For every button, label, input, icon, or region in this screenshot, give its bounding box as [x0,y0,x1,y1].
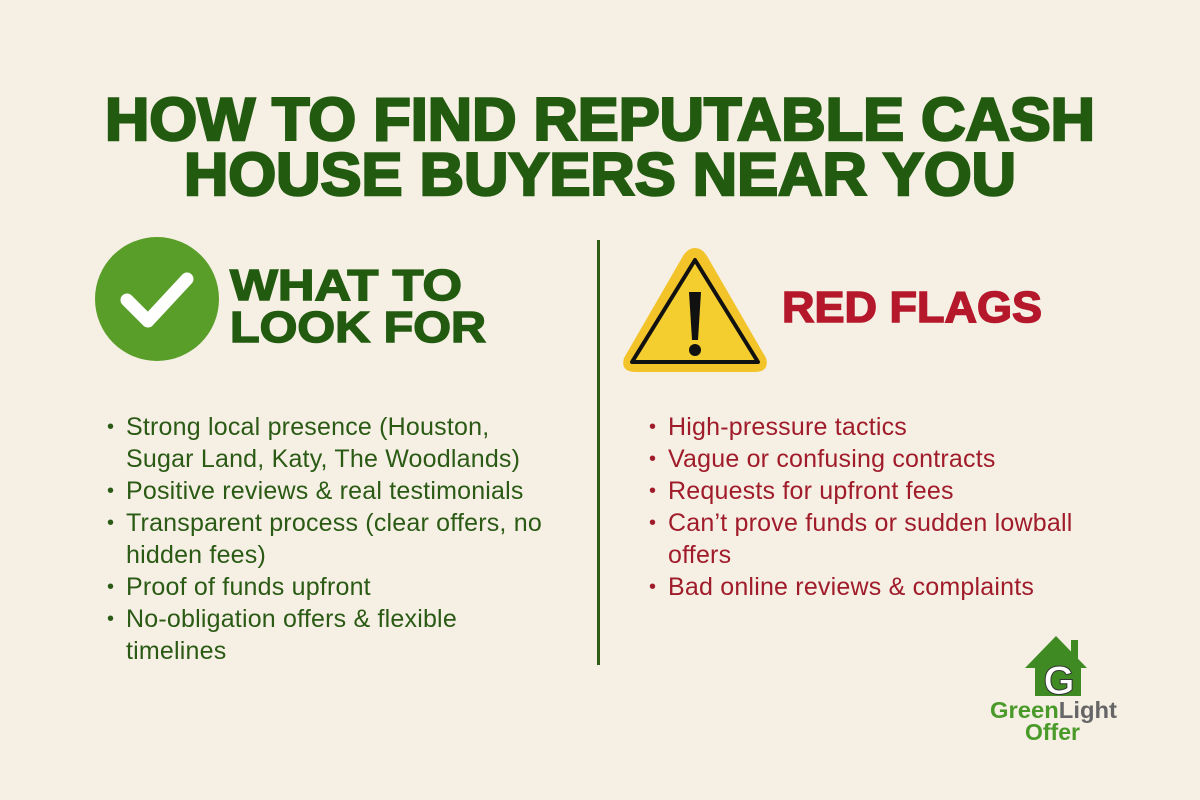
list: what to look for: Sugar Land, Katy, The Woodlands) [126,445,520,473]
heading: what to look for: WHAT TO [230,261,462,310]
logo: GreenLight [990,697,1117,723]
list: red flags: Vague or confusing contracts [668,445,996,473]
list: what to look for: timelines [126,637,226,665]
list: red flags [650,413,1072,601]
list: what to look for: Positive reviews & real testimonials [126,477,524,505]
logo: Offer [1025,719,1080,745]
icon: warning triangle [623,248,767,372]
list: red flags: offers [668,541,731,569]
list: what to look for [108,413,542,665]
list: red flags: Can’t prove funds or sudden lowball [668,509,1072,537]
list: what to look for: No-obligation offers & flexible [126,605,457,633]
list: what to look for: hidden fees) [126,541,266,569]
list: red flags: Requests for upfront fees [668,477,954,505]
list: what to look for: Proof of funds upfront [126,573,371,601]
list: red flags: High-pressure tactics [668,413,907,441]
title [105,86,1095,208]
logo [990,636,1117,745]
icon: check circle [95,237,219,361]
logo: G [1043,659,1075,703]
list: what to look for: Strong local presence (Houston, [126,413,489,441]
heading: what to look for: LOOK FOR [230,303,486,352]
divider [597,240,600,665]
list: red flags: Bad online reviews & complaints [668,573,1034,601]
title: HOUSE BUYERS NEAR YOU [184,141,1016,208]
heading: what to look for [229,261,486,352]
list: what to look for: Transparent process (clear offers, no [126,509,542,537]
title: HOW TO FIND REPUTABLE CASH [105,86,1095,153]
